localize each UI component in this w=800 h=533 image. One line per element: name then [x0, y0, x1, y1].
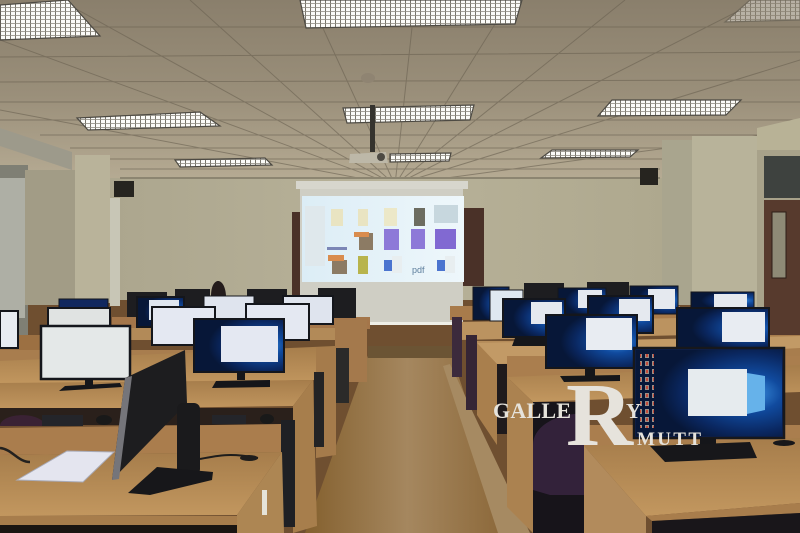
ceiling: [0, 0, 800, 190]
speaker right: [640, 168, 658, 185]
watermark: GALLE: [493, 398, 572, 423]
watermark: MUTT: [637, 429, 701, 450]
ceiling lights: [0, 0, 800, 167]
left front desk: [0, 424, 284, 533]
left second desk: [0, 372, 324, 533]
watermark: Y: [626, 399, 641, 423]
right column and door: [662, 118, 800, 340]
left monitors rear: [0, 296, 333, 348]
lower room base: [0, 300, 800, 533]
monitor left center: [41, 326, 130, 391]
projected desktop: pdf: [412, 265, 425, 275]
speaker left: [114, 181, 134, 197]
right rear monitors: [473, 282, 754, 346]
monitor right mid: [546, 315, 637, 382]
monitor right upper: [677, 308, 769, 348]
cable tray right: [443, 364, 530, 533]
floor: [305, 346, 510, 533]
air conditioner: [0, 128, 72, 170]
right rear desks: [450, 306, 800, 445]
right second desk: [507, 356, 800, 533]
monitor blue center: [194, 319, 284, 388]
projector and mount: [349, 105, 388, 163]
wood panels behind screen: [292, 208, 484, 296]
projector screen: [296, 181, 468, 325]
paper stack: [17, 451, 114, 482]
rear people and black monitors: [127, 281, 356, 318]
back wall: [110, 178, 670, 353]
smoke detector: [361, 73, 375, 83]
left desks rear rows: [0, 317, 370, 458]
left wall and column: [0, 155, 120, 335]
cable: [0, 448, 30, 462]
watermark: [493, 366, 701, 465]
watermark: R: [566, 366, 634, 465]
right front desk: [584, 425, 800, 533]
monitor right front: [634, 348, 795, 462]
monitor rear view: [112, 350, 258, 495]
projected desktop: [302, 196, 464, 282]
wall trim: [120, 177, 660, 179]
